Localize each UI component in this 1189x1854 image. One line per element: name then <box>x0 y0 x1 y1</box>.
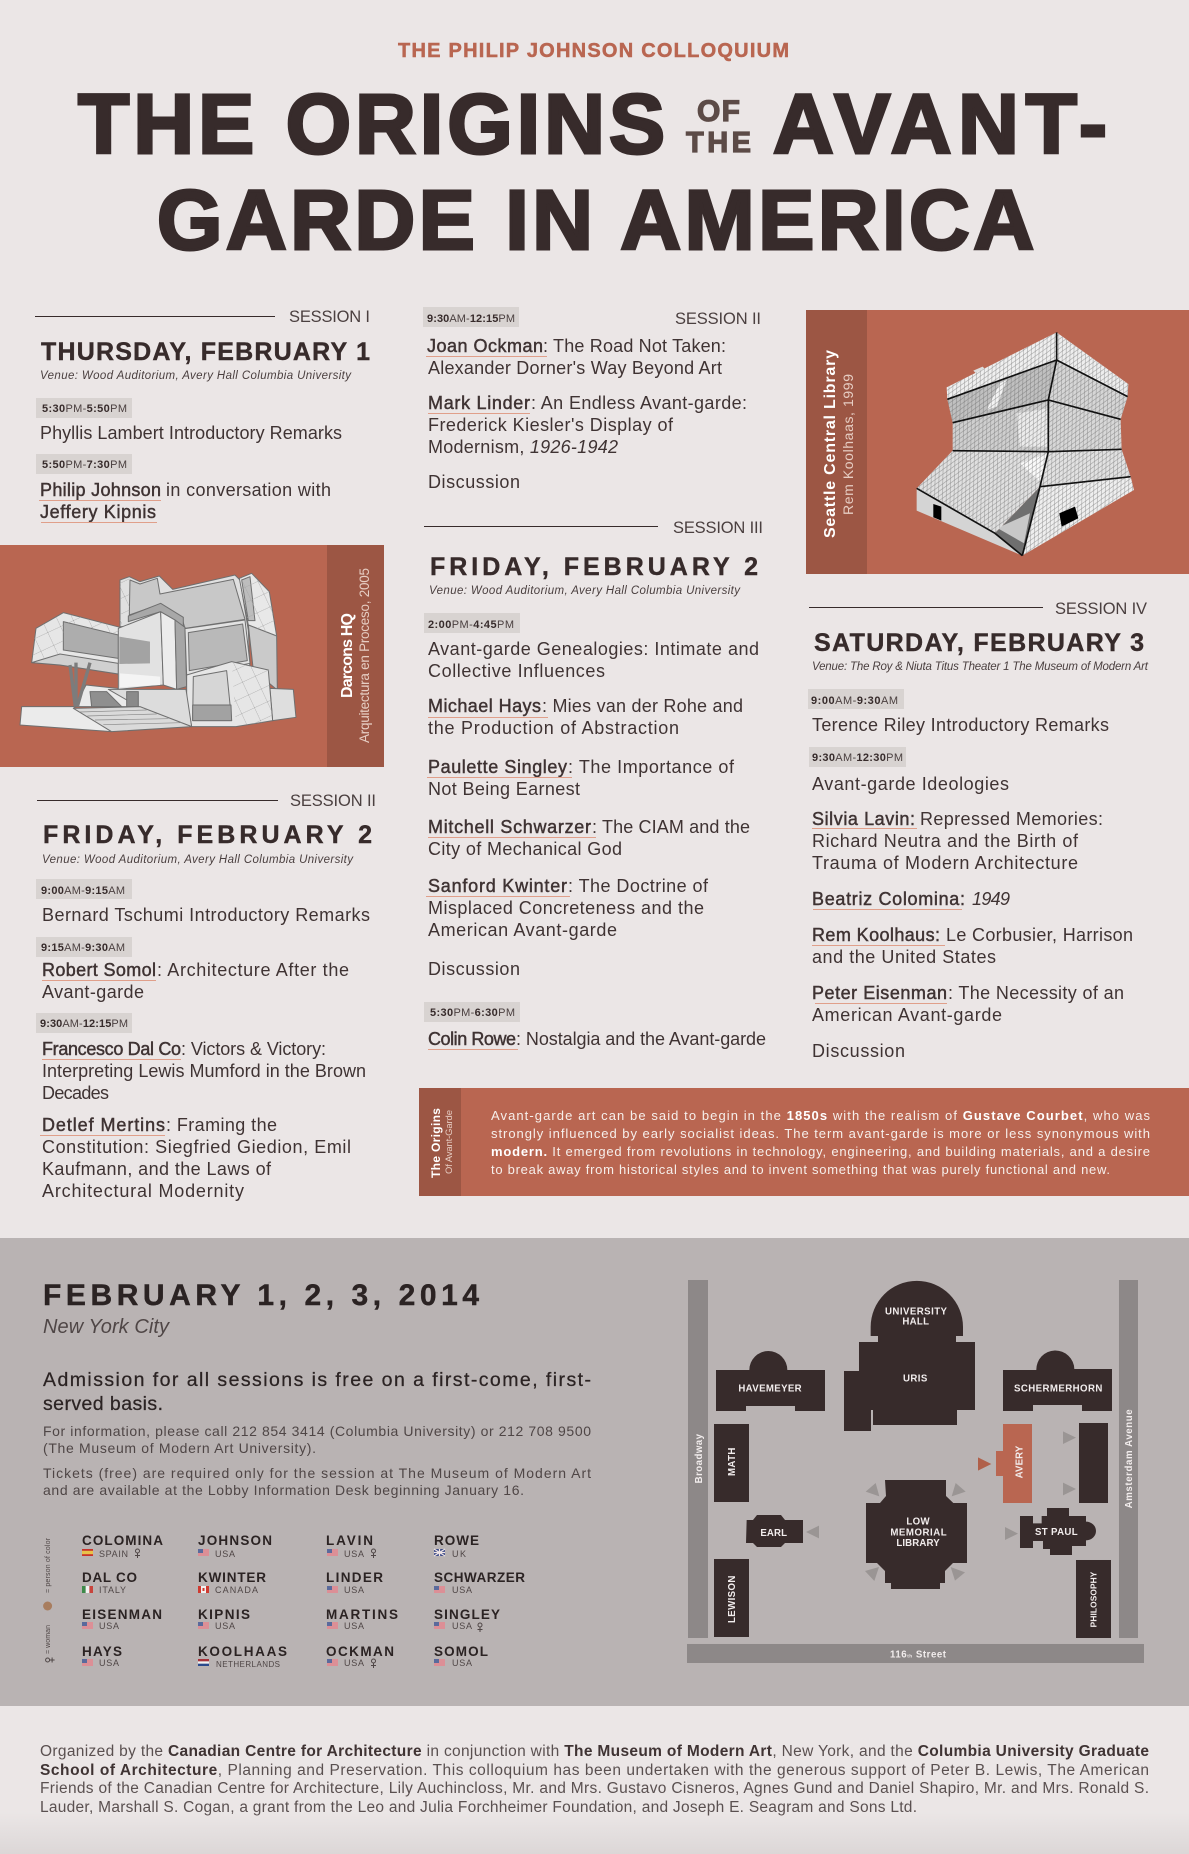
time badge: 9:30AM-12:30PM <box>812 752 903 764</box>
participant: Colomina: SPAIN <box>99 1549 128 1559</box>
time badge <box>36 879 132 899</box>
building: University Hall and Uris: UNIVERSITY <box>885 1307 948 1318</box>
callout text: strongly influenced by early socialist ideas. The term avant-garde is more or less synonymous with <box>491 1126 1150 1141</box>
participant: Eisenman: USA <box>99 1621 119 1631</box>
talk: Peter Eisenman: American Avant-garde <box>812 1005 1002 1025</box>
talk: Joan Ockman: Joan Ockman <box>427 336 543 356</box>
talk: Silvia Lavin <box>812 809 1103 873</box>
street: 116th Street <box>687 1644 1144 1663</box>
callout sidebar: Of Avant-Garde <box>444 1110 455 1174</box>
tickets text: Tickets (free) are required only for the session at The Museum of Modern Art <box>43 1465 591 1481</box>
participant: Kipnis <box>198 1607 250 1631</box>
time badge <box>36 454 132 474</box>
talk: genealogies <box>428 639 759 681</box>
acknowledgements text: Lauder, Marshall S. Cogan, a grant from the Leo and Julia Forchheimer Foundation, and Joseph E. Seagram and Sons Ltd. <box>40 1799 917 1816</box>
talk: Philip Johnson and Jeffery Kipnis <box>39 480 331 523</box>
participant: Johnson: USA <box>215 1549 235 1559</box>
participant: Koolhaas: KOOLHAAS <box>198 1644 287 1659</box>
venue: Venue: The Roy & Niuta Titus Theater 1 The Museum of Modern Art <box>812 661 1149 673</box>
building: St Paul <box>1020 1508 1096 1555</box>
tickets text: and are available at the Lobby Information Desk beginning January 16. <box>43 1482 524 1498</box>
time badge: 2:00PM-4:45PM <box>428 619 514 631</box>
building: University Hall and Uris: HALL <box>902 1317 929 1328</box>
talk: Bernard Tschumi: Bernard Tschumi Introductory Remarks <box>42 905 370 925</box>
title: THE <box>686 127 751 159</box>
building: Philosophy: PHILOSOPHY <box>1088 1571 1098 1627</box>
talk: Mitchell Schwarzer: : The CIAM and the <box>592 817 750 837</box>
talk: Sanford Kwinter <box>426 876 709 940</box>
street: Amsterdam Avenue <box>1119 1280 1138 1638</box>
participant: Somol: USA <box>452 1658 472 1668</box>
talk: Silvia Lavin: Silvia Lavin: <box>812 809 915 829</box>
talk: Silvia Lavin: Trauma of Modern Architecture <box>812 853 1078 873</box>
information text: (The Museum of Modern Art University). <box>43 1440 316 1456</box>
talk: Michael Hays: : Mies van der Rohe and <box>542 696 743 716</box>
participant: Singley: SINGLEY <box>434 1607 500 1622</box>
session label: SESSION I <box>289 308 370 326</box>
talk: Beatriz Colomina: 1949 <box>972 889 1010 909</box>
talk: Rem Koolhaus <box>812 925 1133 967</box>
talk: Mark Linder <box>428 393 747 457</box>
venue: Venue: Wood Auditorium, Avery Hall Columbia University <box>42 854 354 866</box>
time badge <box>36 1013 132 1033</box>
acknowledgements text: School of Architecture, Planning and Preservation. This colloquium has been undertaken with the generous support of Peter B. Lewis, The American <box>40 1762 1149 1779</box>
day heading: SATURDAY, FEBRUARY 3 <box>814 629 1144 657</box>
building: Havemeyer: HAVEMEYER <box>738 1384 802 1395</box>
session label: SESSION IV <box>1055 600 1147 618</box>
participant: Lavin: USA <box>344 1549 364 1559</box>
caption sidebar: Darcons HQ <box>339 613 356 698</box>
participant: Koolhaas: NETHERLANDS <box>216 1660 280 1669</box>
participant: Ockman: USA <box>344 1658 364 1668</box>
talk: Detlef Mertins: : Framing the <box>166 1115 277 1135</box>
talk: Francesco Dal Co <box>42 1039 366 1103</box>
building: Avery (highlighted) <box>996 1424 1032 1503</box>
caption sidebar: Seattle Central Library <box>822 350 839 538</box>
talk: Mitchell Schwarzer <box>428 817 750 859</box>
building: Avery (highlighted): AVERY <box>1014 1445 1025 1478</box>
talk: Robert Somol: Robert Somol <box>42 960 156 980</box>
participant: Linder: USA <box>344 1585 364 1595</box>
building: St Paul: ST PAUL <box>1035 1527 1078 1538</box>
participant: Kipnis: KIPNIS <box>198 1607 250 1622</box>
participant: Eisenman: EISENMAN <box>82 1607 162 1622</box>
building: Math <box>714 1424 749 1502</box>
venue: Venue: Wood Auditorium, Avery Hall Columbia University <box>429 585 741 597</box>
date heading: FEBRUARY 1, 2, 3, 2014 <box>43 1279 479 1312</box>
participant: Hays: HAYS <box>82 1644 122 1659</box>
session label: SESSION II <box>675 310 761 328</box>
talk: Francesco Dal Co: Interpreting Lewis Mumford in the Brown <box>42 1061 366 1081</box>
time badge: 9:15AM-9:30AM <box>41 942 125 954</box>
participant: Rowe: UK <box>452 1549 466 1559</box>
panel: session II continued <box>423 307 761 492</box>
talk: Silvia Lavin: Repressed Memories: <box>920 809 1103 829</box>
street: Broadway <box>688 1280 708 1638</box>
time badge <box>424 613 520 633</box>
time badge <box>36 937 132 957</box>
talk: Francesco Dal Co: Francesco Dal Co <box>42 1039 181 1059</box>
discussion: Discussion <box>812 1041 905 1061</box>
building: Philosophy <box>1076 1560 1111 1638</box>
session rule <box>37 800 278 801</box>
talk: Philip Johnson and Jeffery Kipnis: Jeffery Kipnis <box>40 502 156 522</box>
caption sidebar: Rem Koolhaas, 1999 <box>840 374 856 515</box>
talk: Francesco Dal Co: Decades <box>42 1083 109 1103</box>
building: Low Memorial Library: LOW <box>906 1517 931 1528</box>
callout text <box>491 1108 1150 1177</box>
talk: Detlef Mertins <box>40 1115 351 1201</box>
talk: Philip Johnson and Jeffery Kipnis: in conversation with <box>166 480 331 500</box>
talk: Avant-garde Ideologies: Avant-garde Ideologies <box>812 774 1009 794</box>
participant: Colomina <box>82 1533 163 1559</box>
talk: Paulette Singley: Not Being Earnest <box>428 779 580 799</box>
talk: Peter Eisenman: : The Necessity of an <box>948 983 1124 1003</box>
panel: Darcons HQ <box>0 545 384 767</box>
caption sidebar <box>327 545 384 767</box>
time badge <box>808 689 904 709</box>
participant: Hays: USA <box>99 1658 119 1668</box>
callout sidebar <box>419 1088 461 1196</box>
caption sidebar <box>806 310 867 574</box>
time badge: 9:00AM-9:15AM <box>41 885 125 897</box>
participant: Eisenman <box>82 1607 162 1631</box>
talk: Colin Rowe: Colin Rowe <box>428 1029 516 1049</box>
participant: Martins: USA <box>344 1621 364 1631</box>
footer <box>0 1706 1189 1854</box>
talk: Sanford Kwinter: Misplaced Concreteness and the <box>428 898 704 918</box>
talk: Mark Linder: : An Endless Avant-garde: <box>531 393 747 413</box>
building: Lewison: LEWISON <box>727 1576 738 1623</box>
participant: Linder <box>326 1570 383 1595</box>
venue: Venue: Wood Auditorium, Avery Hall Columbia University <box>40 370 352 382</box>
title: AVANT- <box>773 77 1107 171</box>
time badge <box>424 1002 520 1022</box>
participant: Ockman: OCKMAN <box>326 1644 394 1659</box>
time badge: 5:50PM-7:30PM <box>42 459 127 471</box>
panel: session IV, Saturday <box>808 600 1149 1061</box>
discussion: Discussion <box>428 959 520 979</box>
campus map <box>687 1280 1144 1663</box>
building: Low Memorial Library <box>866 1480 967 1589</box>
acknowledgements text: Friends of the Canadian Centre for Architecture, Lily Auchincloss, Mr. and Mrs. Gustavo Cisneros, Agnes Gund and Daniel Shapiro, Mr. and Mrs. Ronald S. <box>40 1780 1149 1797</box>
session label: SESSION II <box>290 792 376 810</box>
talk: Paulette Singley <box>427 757 735 799</box>
building: University Hall and Uris <box>844 1281 975 1431</box>
participant: Johnson: JOHNSON <box>198 1533 272 1548</box>
talk: Mitchell Schwarzer: Mitchell Schwarzer <box>428 817 591 837</box>
talk: Peter Eisenman: Peter Eisenman <box>812 983 947 1003</box>
participant: Kwinter <box>198 1570 266 1595</box>
callout text: Avant-garde art can be said to begin in the 1850s with the realism of Gustave Courbet, who was <box>491 1108 1150 1123</box>
participants list <box>82 1533 525 1669</box>
legend <box>43 1537 55 1662</box>
building: Earl: EARL <box>760 1528 787 1539</box>
talk: Detlef Mertins: Constitution: Siegfried Giedion, Emil <box>42 1137 351 1157</box>
participant: Singley: USA <box>452 1621 472 1631</box>
participant: Rowe: ROWE <box>434 1533 479 1548</box>
talk: Sanford Kwinter: Sanford Kwinter <box>428 876 567 896</box>
header <box>78 40 1107 267</box>
panel: session II, Friday morning <box>36 792 376 1201</box>
talk: Colin Rowe: : Nostalgia and the Avant-garde <box>516 1029 766 1049</box>
time badge <box>36 398 132 418</box>
participant: Linder: LINDER <box>326 1570 383 1585</box>
participant: Hays <box>82 1644 122 1668</box>
arrow: to Avery <box>978 1457 991 1471</box>
talk: Michael Hays: Michael Hays <box>428 696 541 716</box>
participant: Dal Co <box>82 1570 137 1595</box>
admission note: served basis. <box>43 1393 163 1415</box>
day heading: FRIDAY, FEBRUARY 2 <box>43 821 372 849</box>
talk: Detlef Mertins: Detlef Mertins <box>42 1115 165 1135</box>
acknowledgements text <box>40 1743 1149 1816</box>
participant: Ockman <box>326 1644 394 1668</box>
talk: Beatriz Colomina: Beatriz Colomina: <box>812 889 965 909</box>
participant: Kwinter: KWINTER <box>198 1570 266 1585</box>
participant: Somol: SOMOL <box>434 1644 488 1659</box>
callout text: to break away from historical styles and to invent something that was purely functional and new. <box>491 1162 1110 1177</box>
time badge <box>809 747 906 767</box>
time badge: 9:30AM-12:15PM <box>40 1018 128 1030</box>
time badge: 9:00AM-9:30AM <box>811 695 898 707</box>
street: 116th Street: 116th Street <box>890 1650 947 1661</box>
building: Low Memorial Library: MEMORIAL <box>890 1528 947 1539</box>
street: Amsterdam Avenue: Amsterdam Avenue <box>1124 1409 1135 1508</box>
participant: Lavin: LAVIN <box>326 1533 373 1548</box>
building: Schermerhorn <box>1003 1351 1112 1411</box>
time badge <box>423 307 519 327</box>
time badge: 5:30PM-6:30PM <box>430 1007 515 1019</box>
session rule <box>35 316 275 317</box>
building: Low Memorial Library: LIBRARY <box>896 1538 940 1549</box>
participant: Johnson <box>198 1533 272 1559</box>
time badge: 5:30PM-5:50PM <box>42 403 127 415</box>
arrows: walkways <box>806 1431 1076 1581</box>
building: east block <box>1079 1423 1108 1503</box>
kicker: colloquium name: THE PHILIP JOHNSON COLLOQUIUM <box>398 40 789 62</box>
participant: Schwarzer: SCHWARZER <box>434 1570 525 1585</box>
talk: Paulette Singley: Paulette Singley <box>428 757 567 777</box>
participant: Singley <box>434 1607 500 1632</box>
participant: Dal Co: DAL CO <box>82 1570 137 1585</box>
building: Math: MATH <box>727 1448 738 1476</box>
participant: Colomina: COLOMINA <box>82 1533 163 1548</box>
talk: Robert Somol: Avant-garde <box>42 982 144 1002</box>
participant: Rowe <box>434 1533 479 1559</box>
talk: Michael Hays <box>428 696 743 738</box>
talk: Rem Koolhaus: Rem Koolhaus: <box>812 925 940 945</box>
talk: Joan Ockman: : The Road Not Taken: <box>543 336 726 356</box>
participant: Kipnis: USA <box>215 1621 235 1631</box>
talk: Joan Ockman <box>426 336 726 378</box>
talk: Robert Somol <box>42 960 349 1002</box>
tickets text <box>43 1465 591 1498</box>
session label: SESSION III <box>673 519 763 537</box>
talk: Philip Johnson and Jeffery Kipnis: Philip Johnson <box>40 480 161 500</box>
participant: Dal Co: ITALY <box>99 1585 126 1595</box>
title <box>78 77 1107 267</box>
participant: Martins <box>326 1607 398 1631</box>
building: Lewison <box>714 1559 749 1637</box>
talk: Paulette Singley: : The Importance of <box>568 757 735 777</box>
building drawing: Darcons HQ <box>20 573 296 732</box>
legend: = person of color <box>45 1537 52 1593</box>
panel: Seattle Central Library <box>806 310 1189 574</box>
talk: Mark Linder: Frederick Kiesler's Display of <box>428 415 674 435</box>
talk: Mark Linder: Mark Linder <box>428 393 530 413</box>
discussion: Discussion <box>428 472 520 492</box>
building: University Hall and Uris: URIS <box>903 1374 928 1385</box>
participant: Schwarzer: USA <box>452 1585 472 1595</box>
talk: Mitchell Schwarzer: City of Mechanical God <box>428 839 622 859</box>
panel: session I, Thursday <box>35 308 370 523</box>
talk: Francesco Dal Co: : Victors & Victory: <box>181 1039 326 1059</box>
information text: For information, please call 212 854 3414 (Columbia University) or 212 708 9500 <box>43 1423 591 1439</box>
participant: Kwinter: CANADA <box>215 1585 258 1595</box>
talk: Sanford Kwinter: : The Doctrine of <box>568 876 709 896</box>
title: OF <box>697 95 740 128</box>
callout: the origins of avant-garde <box>419 1088 1189 1196</box>
talk: Silvia Lavin: Richard Neutra and the Birth of <box>812 831 1079 851</box>
panel: session III, Friday afternoon <box>424 519 766 1050</box>
admission note: Admission for all sessions is free on a first-come, first- <box>43 1369 591 1391</box>
building: Earl <box>746 1515 803 1547</box>
information text <box>43 1423 591 1456</box>
participant: Lavin <box>326 1533 376 1559</box>
building: Havemeyer <box>716 1351 825 1411</box>
callout sidebar: The Origins <box>429 1108 443 1178</box>
city: New York City <box>43 1316 170 1338</box>
acknowledgements text: Organized by the Canadian Centre for Architecture in conjunction with The Museum of Modern Art, New York, and the Columbia University Graduate <box>40 1743 1149 1760</box>
talk: Detlef Mertins: Architectural Modernity <box>42 1181 244 1201</box>
building drawing: Seattle library <box>917 332 1134 556</box>
talk: Phyllis Lambert: Phyllis Lambert Introductory Remarks <box>40 423 342 443</box>
caption sidebar: Arquitectura en Proceso, 2005 <box>357 568 372 743</box>
title: GARDE IN AMERICA <box>157 173 1034 267</box>
session rule <box>424 526 658 527</box>
talk: Rem Koolhaus: Le Corbusier, Harrison <box>946 925 1133 945</box>
talk: Sanford Kwinter: American Avant-garde <box>428 920 617 940</box>
title: THE ORIGINS <box>78 77 665 171</box>
day heading: THURSDAY, FEBRUARY 1 <box>41 338 370 366</box>
talk: Peter Eisenman <box>812 983 1124 1025</box>
day heading: FRIDAY, FEBRUARY 2 <box>430 553 758 581</box>
talk: Michael Hays: the Production of Abstraction <box>428 718 679 738</box>
talk: genealogies: Collective Influences <box>428 661 605 681</box>
session rule <box>809 607 1043 608</box>
building: Schermerhorn: SCHERMERHORN <box>1014 1384 1102 1395</box>
street: Broadway: Broadway <box>694 1433 705 1483</box>
talk: Robert Somol: : Architecture After the <box>157 960 349 980</box>
participant: Somol <box>434 1644 488 1668</box>
time badge: 9:30AM-12:15PM <box>427 313 515 325</box>
participant: Schwarzer <box>434 1570 525 1595</box>
talk: Rem Koolhaus: and the United States <box>812 947 996 967</box>
talk: Terence Riley: Terence Riley Introductory Remarks <box>812 715 1109 735</box>
talk: genealogies: Avant-garde Genealogies: Intimate and <box>428 639 759 659</box>
participant: Martins: MARTINS <box>326 1607 398 1622</box>
legend: = woman <box>45 1625 52 1654</box>
participant: Koolhaas <box>198 1644 287 1669</box>
talk: Joan Ockman: Alexander Dorner's Way Beyond Art <box>428 358 722 378</box>
panel: event information band <box>0 1238 1189 1706</box>
admission note <box>43 1369 591 1415</box>
callout text: modern. It emerged from revolutions in technology, engineering, and building materials, and a desire <box>491 1144 1150 1159</box>
talk: Mark Linder: Modernism, 1926-1942 <box>428 437 618 457</box>
talk: Detlef Mertins: Kaufmann, and the Laws of <box>42 1159 272 1179</box>
